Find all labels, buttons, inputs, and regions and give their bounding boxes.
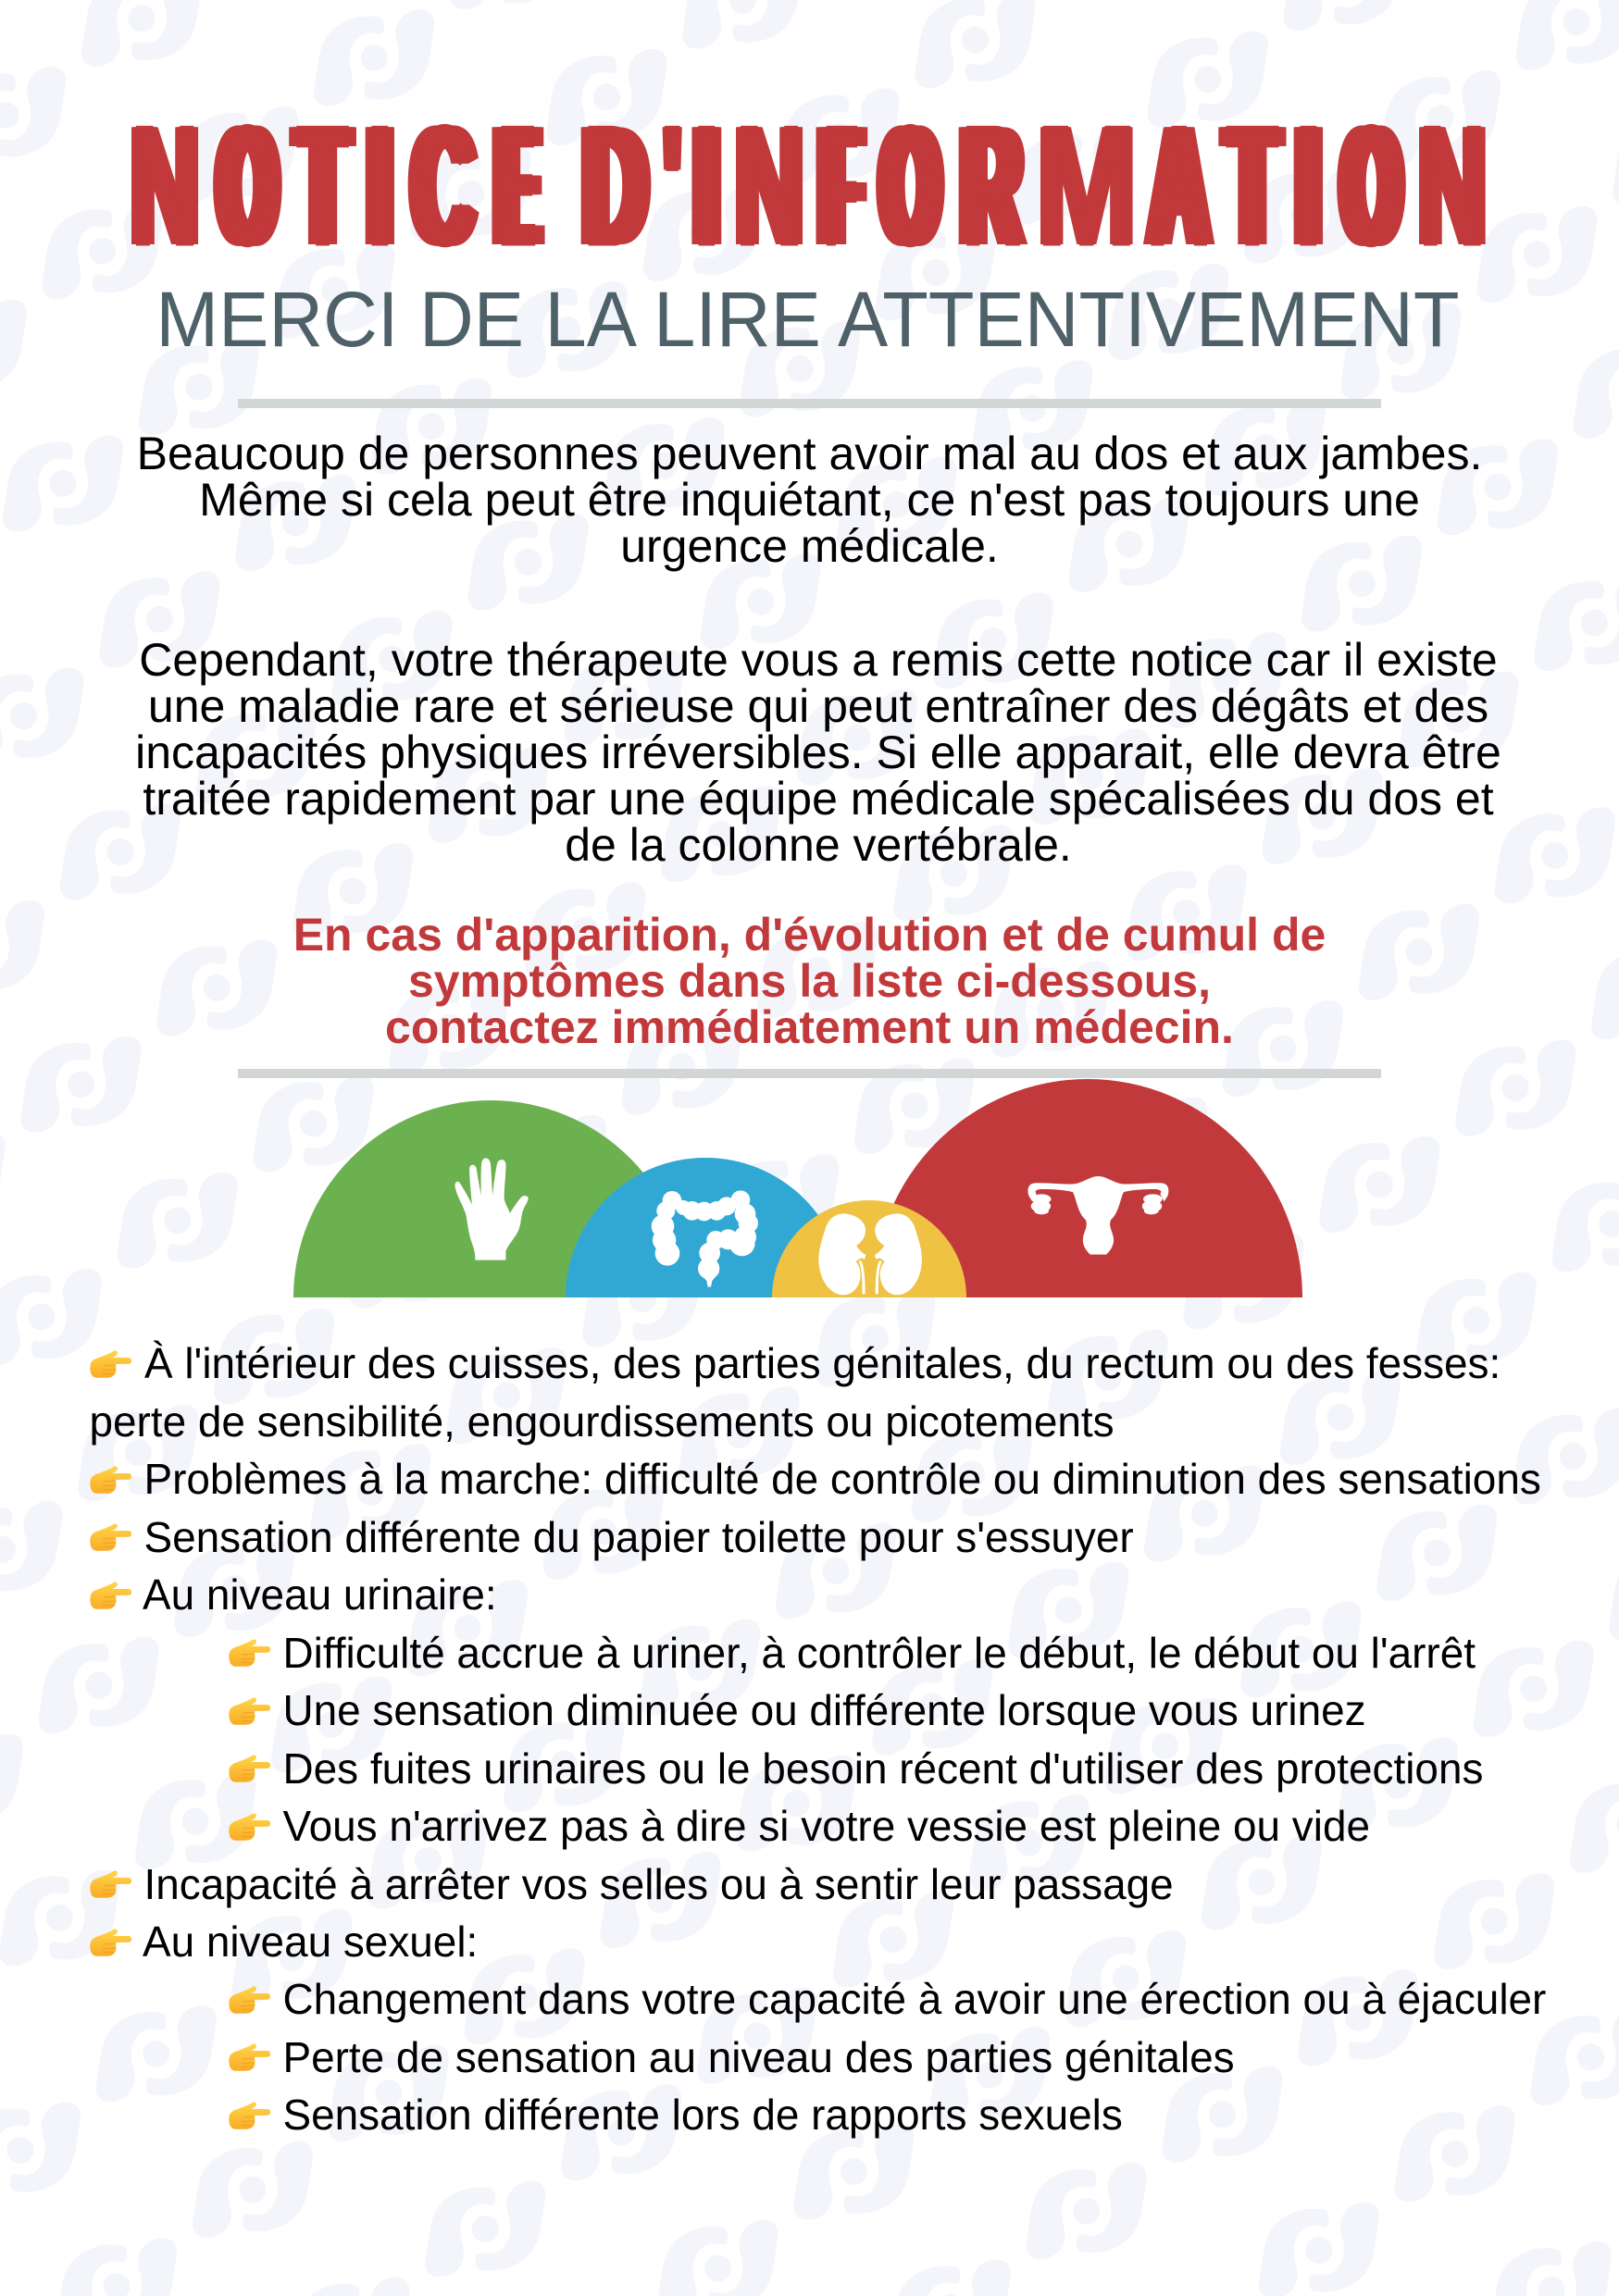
title: N [1418, 90, 1487, 280]
list item: papier toilette: Sensation différente du papier toilette pour s'essuyer [144, 1513, 1134, 1561]
title: D [583, 90, 646, 280]
sub-item: difficulté: Difficulté accrue à uriner, à contrôler le début, le début ou l'arrêt [283, 1629, 1476, 1677]
intro paragraph 1 [137, 428, 1482, 572]
red warning text: symptômes dans la liste ci-dessous, [408, 955, 1211, 1007]
title: A [1150, 90, 1208, 280]
title: N [131, 90, 200, 280]
icon: colon [652, 1190, 758, 1287]
title: O [882, 90, 939, 280]
title: T [1226, 90, 1278, 280]
sub-item: érection: Changement dans votre capacité à avoir une érection ou à éjaculer [283, 1975, 1546, 2023]
title: ' [660, 90, 684, 280]
title: M [1035, 90, 1137, 280]
list item: urinaire: Au niveau urinaire: [143, 1570, 497, 1619]
intro paragraph 1: Beaucoup de personnes peuvent avoir mal au dos et aux jambes. [137, 428, 1482, 479]
intro paragraph 2 [135, 633, 1501, 870]
icon: uterus [1027, 1176, 1168, 1255]
dome: red with uterus [873, 1079, 1302, 1297]
title: O [218, 90, 275, 280]
intro paragraph 2: une maladie rare et sérieuse qui peut entraîner des dégâts et des [148, 679, 1488, 731]
list item: sexuel: Au niveau sexuel: [143, 1917, 478, 1966]
sub-item: vessie: Vous n'arrivez pas à dire si votre vessie est pleine ou vide [283, 1802, 1370, 1850]
icon: kidneys [818, 1213, 922, 1295]
intro paragraph 2: incapacités physiques irréversibles. Si elle apparait, elle devra être [135, 726, 1501, 777]
title: T [296, 90, 349, 280]
dome: green with hand [293, 1100, 688, 1297]
title [131, 90, 1487, 280]
title: O [1342, 90, 1399, 280]
title: E [498, 90, 537, 280]
dome: blue with colon [566, 1158, 845, 1297]
subtitle: MERCI DE LA LIRE ATTENTIVEMENT [156, 276, 1460, 363]
sub-item: perte de sensation: Perte de sensation au niveau des parties génitales [283, 2033, 1235, 2081]
list item continuation: perte de sensibilité, engourdissements ou picotements [89, 1397, 1115, 1446]
list item: selles: Incapacité à arrêter vos selles ou à sentir leur passage [144, 1860, 1174, 1908]
sub-item: sensation diminuée: Une sensation diminuée ou différente lorsque vous urinez [283, 1686, 1366, 1734]
title: I [1294, 90, 1323, 280]
intro paragraph 1: urgence médicale. [620, 520, 999, 572]
intro paragraph 2: de la colonne vertébrale. [565, 818, 1072, 870]
list item: marche: Problèmes à la marche: difficulté de contrôle ou diminution des sensations [144, 1455, 1541, 1503]
icon: hand [455, 1158, 529, 1260]
list item: cuisses: À l'intérieur des cuisses, des parties génitales, du rectum ou des fesses: [144, 1339, 1501, 1387]
red warning text: contactez immédiatement un médecin. [385, 1001, 1234, 1053]
intro paragraph 2: Cependant, votre thérapeute vous a remis cette notice car il existe [139, 633, 1498, 685]
sub-item: fuites: Des fuites urinaires ou le besoin récent d'utiliser des protections [283, 1744, 1483, 1793]
dome: yellow with kidneys [772, 1200, 966, 1297]
title: C [413, 90, 473, 280]
title: I [692, 90, 721, 280]
title: I [366, 90, 393, 280]
red warning text [293, 909, 1326, 1053]
title: R [962, 90, 1021, 280]
title: F [823, 90, 859, 280]
sub-item: rapports: Sensation différente lors de rapports sexuels [283, 2091, 1123, 2139]
intro paragraph 2: traitée rapidement par une équipe médicale spécalisées du dos et [143, 772, 1494, 824]
title: N [735, 90, 803, 280]
red warning text: En cas d'apparition, d'évolution et de cumul de [293, 909, 1326, 961]
intro paragraph 1: Même si cela peut être inquiétant, ce n'est pas toujours une [199, 474, 1420, 526]
